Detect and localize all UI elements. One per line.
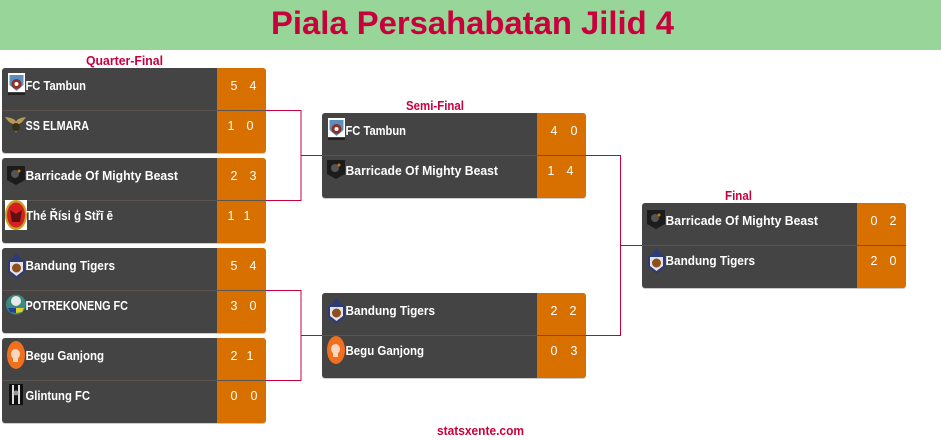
icon: Begu Ganjong [327,336,345,364]
team: Bandung Tigers: Bandung Tigers [26,259,115,273]
team: Potrekoneng FC: POTREKONENG FC [26,299,128,313]
icon: Bandung Tigers [8,253,25,279]
panel: semi-final 1: 0 [571,124,578,138]
panel: semi-final 2 [322,293,586,379]
team: FC Tambun: FC Tambun [346,124,406,138]
heading: Final: Final [725,189,752,203]
panel: quarter-final 3 [2,248,266,334]
icon: Potrekoneng FC [6,294,26,314]
score: 1 [228,209,235,223]
icon: The Rising Strike [5,200,27,230]
team: Bandung Tigers: Bandung Tigers [346,304,435,318]
team: Barricade Of Mighty Beast: Barricade Of Mighty Beast [26,169,179,183]
score: 5 [231,79,238,93]
score: 2 [231,169,238,183]
team: SS Elmara: SS ELMARA [26,119,89,133]
panel: quarter-final 4: 1 [247,349,254,363]
heading: Semi-Final: Semi-Final [406,99,464,113]
panel: quarter-final 3: 0 [250,299,257,313]
footer: site credit: statsxente.com [437,424,524,438]
score: 2 [551,304,558,318]
panel: quarter-final 4 [2,338,266,424]
panel: semi-final 2: 3 [571,344,578,358]
icon: Barricade Of Mighty Beast [7,166,25,185]
panel: quarter-final 4: 0 [251,389,258,403]
panel: quarter-final 1: 0 [247,119,254,133]
panel: quarter-final 3: 4 [250,259,257,273]
connector: quarter-finals 3-4 to semi-final [266,290,322,380]
icon: Bandung Tigers [648,248,665,274]
panel: final: 2 [890,214,897,228]
panel: semi-final 1 [322,113,586,199]
panel: final [642,203,906,289]
team: Begu Ganjong: Begu Ganjong [26,349,104,363]
panel: quarter-final 1: 4 [250,79,257,93]
icon: Barricade Of Mighty Beast [327,160,345,179]
panel: semi-final 2: 2 [570,304,577,318]
header banner [0,0,941,50]
panel: semi-final 1: 4 [567,164,574,178]
team: The Rising Strike: Thé Řísi ģ Střī ē [26,208,113,223]
icon: FC Tambun [8,73,25,95]
team: Bandung Tigers: Bandung Tigers [666,254,755,268]
icon: Bandung Tigers [328,298,345,324]
score: 2 [231,349,238,363]
score: 5 [231,259,238,273]
team: Barricade Of Mighty Beast: Barricade Of Mighty Beast [346,164,499,178]
icon: FC Tambun [328,118,345,140]
connector: quarter-finals 1-2 to semi-final [266,110,322,200]
score: 1 [548,164,555,178]
panel: final: 0 [890,254,897,268]
score: 0 [871,214,878,228]
icon: Barricade Of Mighty Beast [647,210,665,229]
connector: semi-finals to final [586,156,642,336]
score: 0 [551,344,558,358]
panel: quarter-final 1 [2,68,266,154]
panel: quarter-final 2: 3 [250,169,257,183]
team: Begu Ganjong: Begu Ganjong [346,344,424,358]
panel: quarter-final 2: 1 [244,209,251,223]
score: 4 [551,124,558,138]
score: 1 [228,119,235,133]
icon: Begu Ganjong [7,341,25,369]
heading: Quarter-Final: Quarter-Final [86,54,163,68]
team: Glintung FC: Glintung FC [26,389,90,403]
icon: Glintung FC [9,384,23,405]
score: 3 [231,299,238,313]
title: Piala Persahabatan Jilid 4 [271,5,674,41]
team: Barricade Of Mighty Beast: Barricade Of Mighty Beast [666,214,819,228]
score: 2 [871,254,878,268]
panel: quarter-final 2 [2,158,266,244]
icon: SS Elmara [5,117,26,133]
score: 0 [231,389,238,403]
team: FC Tambun: FC Tambun [26,79,86,93]
